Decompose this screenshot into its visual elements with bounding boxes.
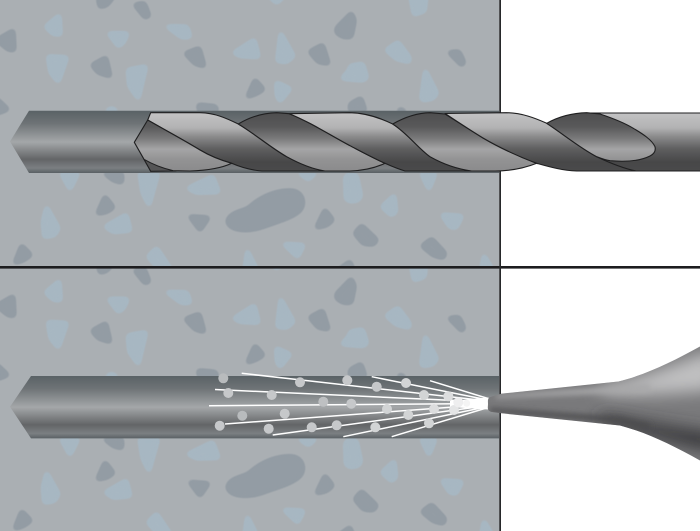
nozzle wide shadow at the flare xyxy=(600,414,700,452)
concrete surface edge line xyxy=(499,0,501,531)
nozzle highlight band xyxy=(496,386,617,400)
nozzle base xyxy=(486,340,700,465)
bit point sliver xyxy=(144,159,176,171)
bit land 3 xyxy=(445,113,636,171)
light aggregate xyxy=(43,0,493,270)
spray lines xyxy=(209,373,488,437)
drill bit xyxy=(134,113,700,171)
white wedge at nozzle xyxy=(450,398,488,410)
panel: concrete block, bottom xyxy=(0,262,500,531)
air nozzle xyxy=(486,340,700,465)
bit land 1 xyxy=(148,113,325,171)
bit flute 2 xyxy=(238,113,385,171)
divider between the two steps xyxy=(0,266,700,269)
drilled hole, bottom xyxy=(10,376,499,438)
dark aggregate xyxy=(0,0,464,270)
dust particles xyxy=(215,373,470,434)
air blast: lines and dust particles xyxy=(209,373,488,437)
panel: concrete block, top xyxy=(0,0,500,270)
bit shaft xyxy=(585,113,700,171)
bit flute 3 xyxy=(393,113,537,171)
bit flute 1 xyxy=(134,120,232,171)
nozzle shadow band xyxy=(489,406,640,424)
bit flute 4 xyxy=(547,113,655,161)
concrete aggregate stones, bottom xyxy=(0,262,493,531)
concrete aggregate stones, top xyxy=(0,0,493,270)
bit land 2 xyxy=(289,113,472,171)
nozzle wide highlight at the flare xyxy=(600,350,700,395)
drilled hole, top xyxy=(10,111,499,173)
